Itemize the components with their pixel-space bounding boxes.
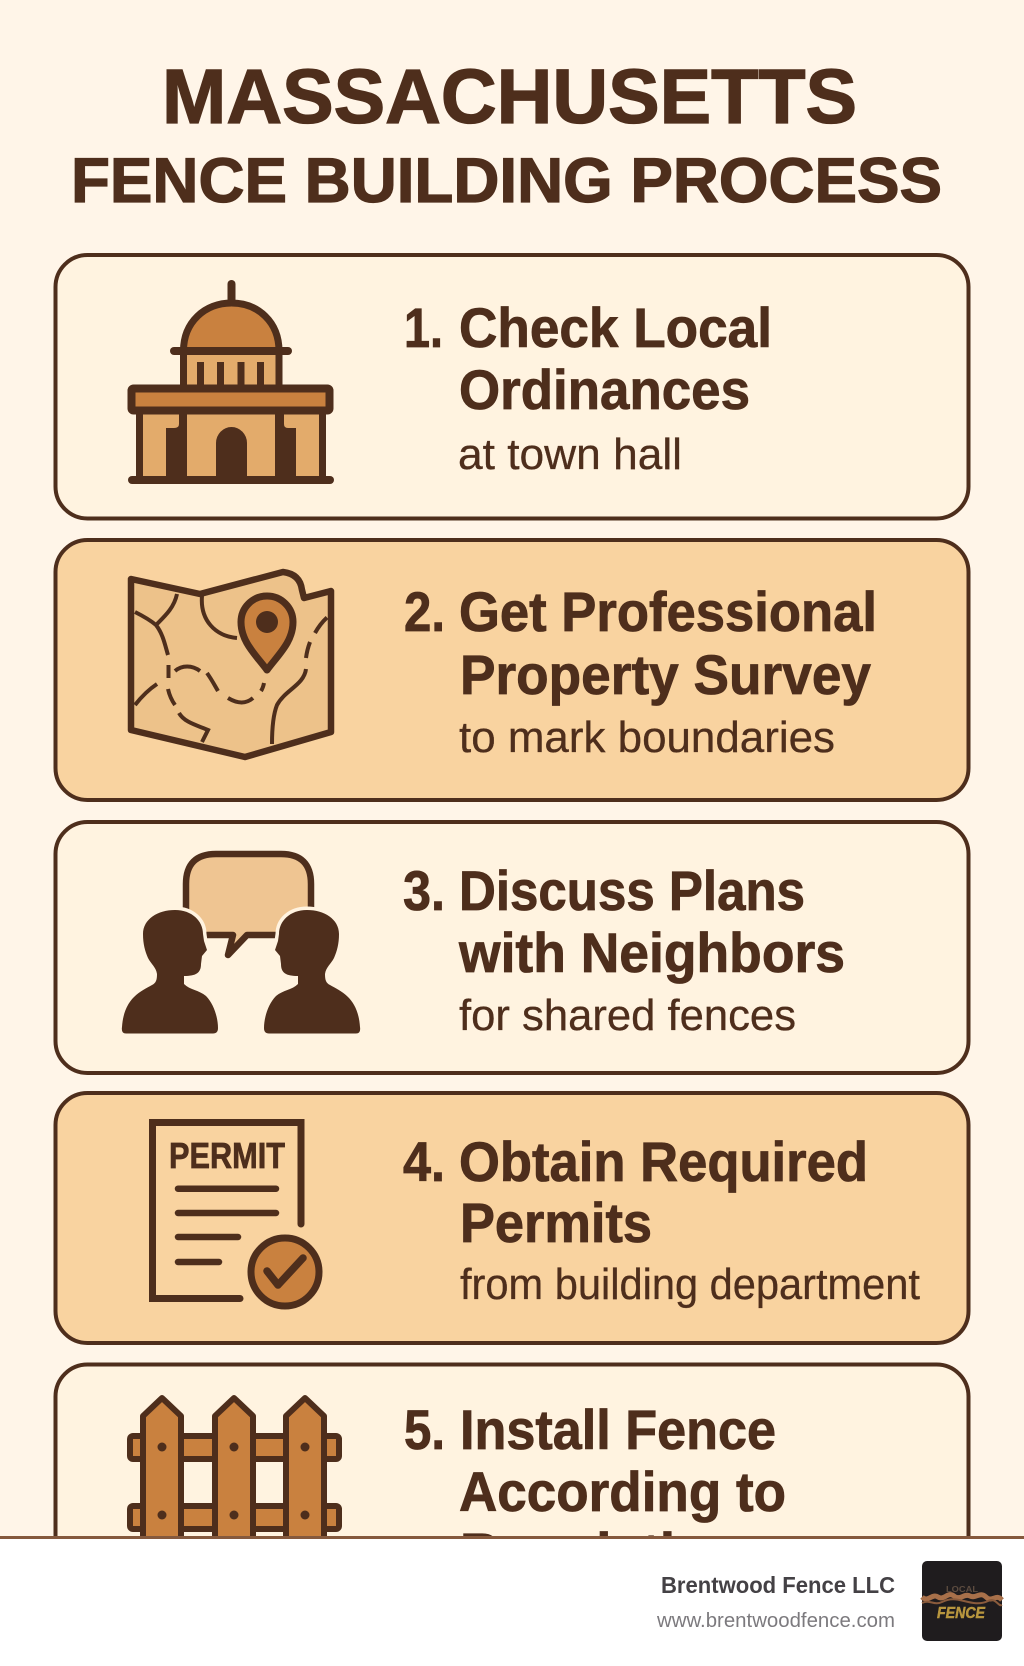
heading: step 4: 4. [403, 1130, 445, 1193]
heading: step 4 [403, 1130, 868, 1254]
icon: company logo [922, 1561, 1002, 1641]
heading: step 4: Permits [460, 1191, 652, 1254]
icon: company logo: LOCAL [946, 1585, 978, 1594]
heading: step 2: Get Professional [459, 580, 877, 643]
icon: map with pin [131, 572, 331, 757]
description: step 2: to mark boundaries [459, 713, 835, 762]
title: MASSACHUSETTS [162, 54, 857, 140]
heading: step 5: Install Fence [460, 1398, 776, 1461]
company name: Brentwood Fence LLC [661, 1572, 895, 1598]
heading: step 1: Check Local [459, 296, 772, 359]
heading: step 1: Ordinances [459, 358, 750, 421]
heading: step 5: Regulations [460, 1521, 772, 1584]
description: step 4: from building department [460, 1260, 920, 1309]
heading: step 3 [403, 859, 845, 984]
panel: step 3 discuss with neighbors [56, 822, 968, 1073]
heading: step 1: 1. [404, 296, 443, 359]
heading: step 2: 2. [404, 580, 445, 643]
heading: step 2: Property Survey [460, 643, 871, 706]
heading: step 5 [404, 1398, 786, 1584]
panel: step 5 install fence [56, 1364, 968, 1624]
icon: picket fence [130, 1398, 339, 1560]
panel: step 1 check local ordinances [56, 255, 968, 518]
icon: two neighbors talking [118, 854, 368, 1039]
icon: company logo: FENCE [937, 1605, 986, 1622]
website: www.brentwoodfence.com [656, 1610, 895, 1632]
description: step 3: for shared fences [459, 991, 796, 1040]
heading: step 3: Discuss Plans [459, 859, 805, 922]
panel: step 4 obtain permits [56, 1093, 968, 1343]
heading: step 3: 3. [403, 859, 445, 922]
icon: town hall [132, 284, 330, 480]
heading: step 5: According to [459, 1460, 786, 1523]
heading: step 5: 5. [404, 1398, 445, 1461]
description: step 1: at town hall [458, 430, 682, 479]
heading: step 3: with Neighbors [458, 921, 845, 984]
icon: permit document with check: PERMIT [169, 1135, 285, 1176]
heading: step 1 [404, 296, 772, 421]
heading: step 2 [404, 580, 877, 706]
panel: step 2 property survey [56, 540, 968, 800]
title: FENCE BUILDING PROCESS [71, 146, 942, 216]
icon: permit document with check [152, 1122, 319, 1306]
heading: step 4: Obtain Required [459, 1130, 868, 1193]
title [71, 54, 942, 216]
footer bar [0, 1536, 1024, 1666]
